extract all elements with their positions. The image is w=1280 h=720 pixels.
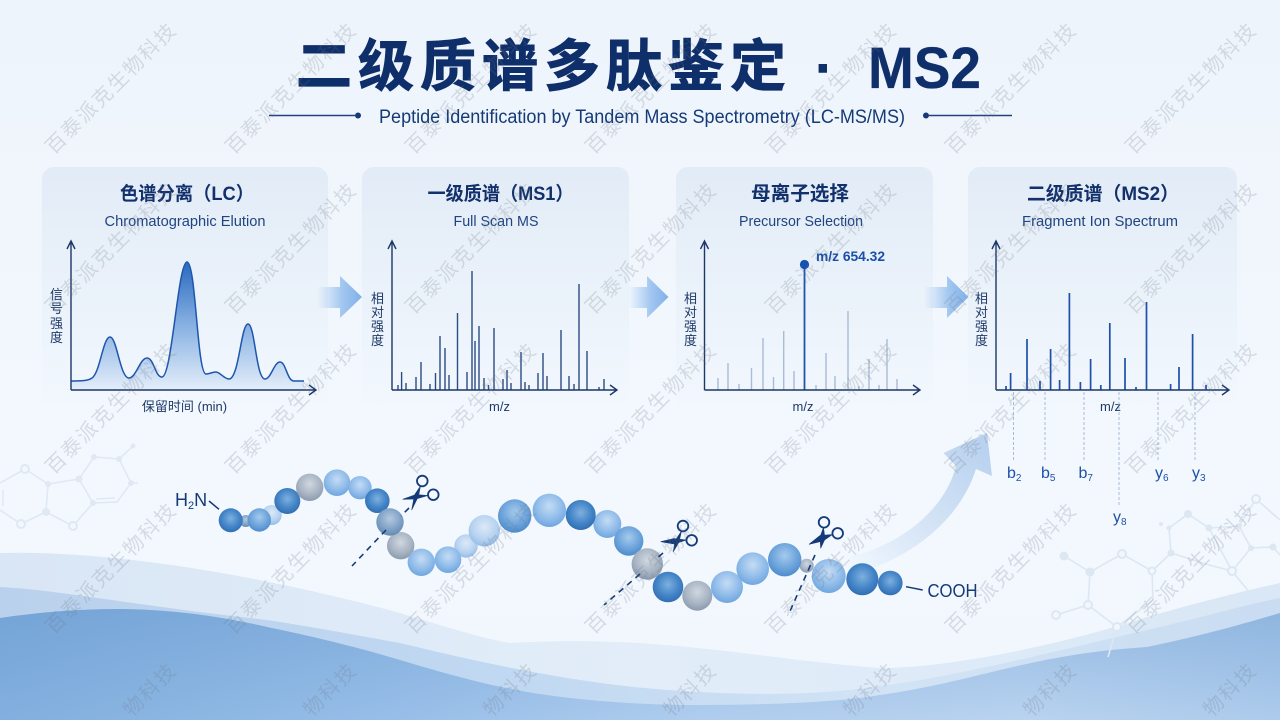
chart: MS1 spectrum xyxy=(388,241,617,395)
watermark grid: 百泰派克生物科技 xyxy=(941,338,1082,479)
watermark grid: 百泰派克生物科技 xyxy=(221,498,362,639)
panel subheading: MS1: Full Scan MS xyxy=(454,213,538,230)
watermark grid: 百泰派克生物科技 xyxy=(761,338,902,479)
decoration: molecule right xyxy=(1052,495,1280,657)
panel subheading: MS2: Fragment Ion Spectrum xyxy=(1022,213,1178,230)
callout: precursor m/z: m/z 654.32 xyxy=(816,249,885,264)
fragment ion guide lines xyxy=(1014,392,1195,507)
panel: MS1 full scan xyxy=(362,167,629,415)
title: · xyxy=(815,36,834,99)
panel subheading: LC: Chromatographic Elution xyxy=(104,213,266,230)
panel: precursor selection xyxy=(676,167,933,415)
y-axis label: MS2 relative intensity: 相对强度 xyxy=(975,291,988,348)
watermark grid: 百泰派克生物科技 xyxy=(761,498,902,639)
watermark grid: 百泰派克生物科技 xyxy=(221,338,362,479)
watermark grid: 百泰派克生物科技 xyxy=(941,178,1082,319)
label: N-terminus: 2 xyxy=(188,500,194,512)
watermark grid: 百泰派克生物科技 xyxy=(401,18,542,159)
panel heading: precursor: 母离子选择 xyxy=(751,182,849,205)
fragment ion labels: 8 xyxy=(1121,517,1127,528)
fragment ion labels xyxy=(1007,465,1206,528)
panel: MS2 fragment spectrum xyxy=(968,167,1237,415)
watermark grid: 物科技 xyxy=(119,658,182,720)
background waves xyxy=(0,553,1280,720)
watermark grid: 百泰派克生物科技 xyxy=(41,338,182,479)
title: MS2 xyxy=(868,36,981,101)
arrow: precursor to MS2 xyxy=(924,276,968,318)
peptide chain xyxy=(219,469,903,611)
icon: scissors cleavage 2 xyxy=(604,521,697,605)
label: C-terminus xyxy=(906,581,978,601)
fragment ion labels: y xyxy=(1192,465,1200,482)
panel heading: LC: 色谱分离（LC） xyxy=(120,182,254,205)
label: N-terminus xyxy=(175,490,219,512)
y-axis label: precursor relative intensity: 相对强度 xyxy=(684,291,697,348)
label: N-terminus: H xyxy=(175,490,188,510)
panel: LC chromatographic elution xyxy=(42,167,328,415)
icon: scissors cleavage 3 xyxy=(788,517,843,615)
watermark grid: 百泰派克生物科技 xyxy=(1121,18,1262,159)
chart: precursor spectrum xyxy=(700,241,920,395)
x-axis label: MS1 m/z: m/z xyxy=(489,399,510,414)
watermark grid: 百泰派克生物科技 xyxy=(581,498,722,639)
watermark grid: 百泰派克生物科技 xyxy=(761,178,902,319)
watermark grid: 百泰派克生物科技 xyxy=(581,18,722,159)
watermark grid: 百泰派克生物科技 xyxy=(761,18,902,159)
fragment ion labels: b xyxy=(1007,465,1016,482)
chart: MS2 spectrum xyxy=(992,241,1229,395)
watermark grid: 百泰派克生物科技 xyxy=(41,178,182,319)
watermark grid: 百泰派克生物科技 xyxy=(41,498,182,639)
watermark grid: 百泰派克生物科技 xyxy=(41,18,182,159)
fragment ion labels: b xyxy=(1041,465,1050,482)
x-axis label: precursor m/z: m/z xyxy=(793,399,813,414)
panel subheading: precursor: Precursor Selection xyxy=(739,213,863,230)
x-axis label: retention time: 保留时间 (min) xyxy=(142,399,227,414)
watermark grid: 百泰派克生物科技 xyxy=(941,498,1082,639)
watermark grid: 百泰派克生物科技 xyxy=(941,18,1082,159)
arrow: curved peptide to MS2 xyxy=(850,433,992,575)
decoration: molecule left xyxy=(0,444,138,530)
watermark grid: 物科技 xyxy=(299,658,362,720)
fragment ion labels: y xyxy=(1155,465,1163,482)
arrow: MS1 to precursor xyxy=(628,276,668,318)
panel heading: MS1: 一级质谱（MS1） xyxy=(428,182,574,205)
watermark grid: 百泰派克生物科技 xyxy=(581,338,722,479)
fragment ion labels: 5 xyxy=(1050,473,1056,484)
arrow: LC to MS1 xyxy=(317,276,362,318)
title xyxy=(296,35,981,101)
x-axis label: MS2 m/z: m/z xyxy=(1100,399,1121,414)
watermark grid: 百泰派克生物科技 xyxy=(401,178,542,319)
watermark grid: 百泰派克生物科技 xyxy=(221,178,362,319)
watermark grid: 物科技 xyxy=(1019,658,1082,720)
watermark grid: 百泰派克生物科技 xyxy=(1121,338,1262,479)
subtitle: Peptide Identification by Tandem Mass Spectrometry (LC-MS/MS) xyxy=(379,107,905,128)
icon: scissors cleavage 1 xyxy=(352,476,439,566)
watermark grid: 物科技 xyxy=(839,658,902,720)
chart: chromatogram xyxy=(67,241,316,395)
panel heading: MS2: 二级质谱（MS2） xyxy=(1027,182,1179,205)
watermark grid: 百泰派克生物科技 xyxy=(1121,498,1262,639)
watermark grid: 百泰派克生物科技 xyxy=(401,498,542,639)
fragment ion labels: y xyxy=(1113,509,1121,526)
fragment ion labels: 7 xyxy=(1087,473,1093,484)
y-axis label: signal intensity: 信号强度 xyxy=(50,287,63,345)
fragment ion labels: b xyxy=(1078,465,1087,482)
watermark grid: 百泰派克生物科技 xyxy=(401,338,542,479)
watermark grid: 百泰派克生物科技 xyxy=(221,18,362,159)
label: C-terminus: COOH xyxy=(928,581,978,601)
title: 二级质谱多肽鉴定 xyxy=(296,35,792,98)
fragment ion labels: 2 xyxy=(1016,473,1022,484)
watermark grid: 百泰派克生物科技 xyxy=(581,178,722,319)
watermark grid: 物科技 xyxy=(479,658,542,720)
watermark grid: 百泰派克生物科技 xyxy=(1121,178,1262,319)
watermark grid: 物科技 xyxy=(659,658,722,720)
fragment ion labels: 6 xyxy=(1163,473,1169,484)
watermark grid: 物科技 xyxy=(1199,658,1262,720)
y-axis label: MS1 relative intensity: 相对强度 xyxy=(371,291,384,348)
fragment ion labels: 3 xyxy=(1200,473,1206,484)
label: N-terminus: N xyxy=(194,490,207,510)
